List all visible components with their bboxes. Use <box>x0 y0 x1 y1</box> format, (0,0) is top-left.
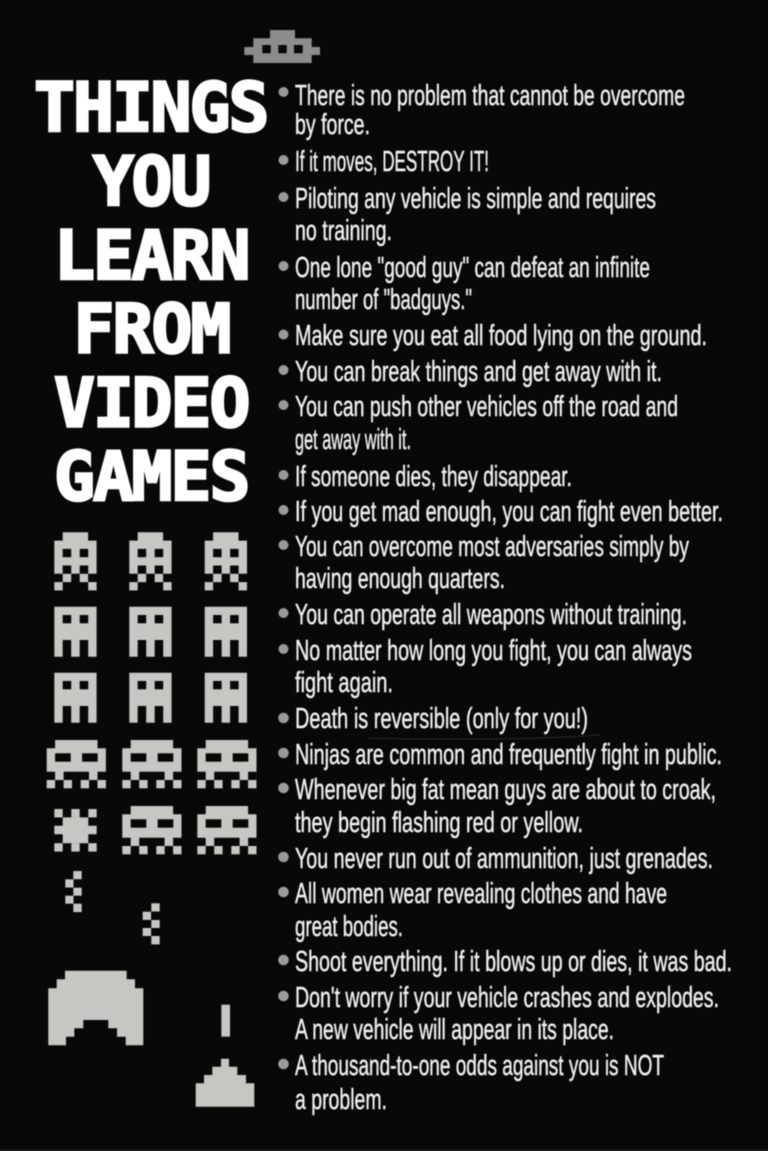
item 17 <box>278 878 667 943</box>
item 3 <box>278 183 656 247</box>
icon: explosion <box>54 809 97 852</box>
title: VIDEO <box>54 365 250 444</box>
item 10: having enough quarters. <box>295 563 505 595</box>
title <box>34 69 269 517</box>
invader row 3 <box>54 673 247 723</box>
item 15 <box>278 774 716 839</box>
title: YOU <box>93 143 211 222</box>
title: LEARN <box>54 217 250 296</box>
item 12 <box>278 635 692 699</box>
item 13 <box>278 703 588 735</box>
item 4: number of "badguys." <box>295 284 472 316</box>
item 10 <box>278 531 689 595</box>
item 19: A new vehicle will appear in its place. <box>295 1014 614 1046</box>
title: GAMES <box>54 438 250 517</box>
item 19 <box>278 982 719 1046</box>
item 8 <box>278 461 572 493</box>
item 2: If it moves, DESTROY IT! <box>295 146 489 178</box>
item 15: they begin flashing red or yellow. <box>295 807 583 839</box>
invader row 1 <box>54 532 247 590</box>
invader row 2 <box>54 607 247 657</box>
item 8: If someone dies, they disappear. <box>295 461 572 493</box>
item 1 <box>278 80 685 141</box>
item 17: great bodies. <box>295 911 403 943</box>
panel: invader formation <box>47 532 257 854</box>
item 20: a problem. <box>295 1084 387 1116</box>
icon: falling bomb right <box>143 903 160 944</box>
item 2 <box>278 146 489 178</box>
icon: player cannon <box>196 1059 254 1107</box>
icon: laser shot <box>221 1005 230 1037</box>
item 3: no training. <box>295 215 392 247</box>
panel: list of lessons <box>278 80 732 1116</box>
icon: defense bunker <box>48 971 143 1045</box>
item 13: Death is reversible (only for you!) <box>295 703 588 735</box>
item 20 <box>278 1050 664 1116</box>
item 12: fight again. <box>295 667 393 699</box>
item 1: by force. <box>295 109 370 141</box>
icon: flying saucer <box>244 30 320 63</box>
title: FROM <box>74 291 231 370</box>
item 4 <box>278 252 650 316</box>
icon: falling bomb left <box>65 871 82 912</box>
item 7: get away with it. <box>295 424 411 456</box>
title: THINGS <box>34 69 269 148</box>
item 7 <box>278 391 678 456</box>
invader row 5 <box>122 806 256 854</box>
invader row 4 <box>47 740 257 788</box>
